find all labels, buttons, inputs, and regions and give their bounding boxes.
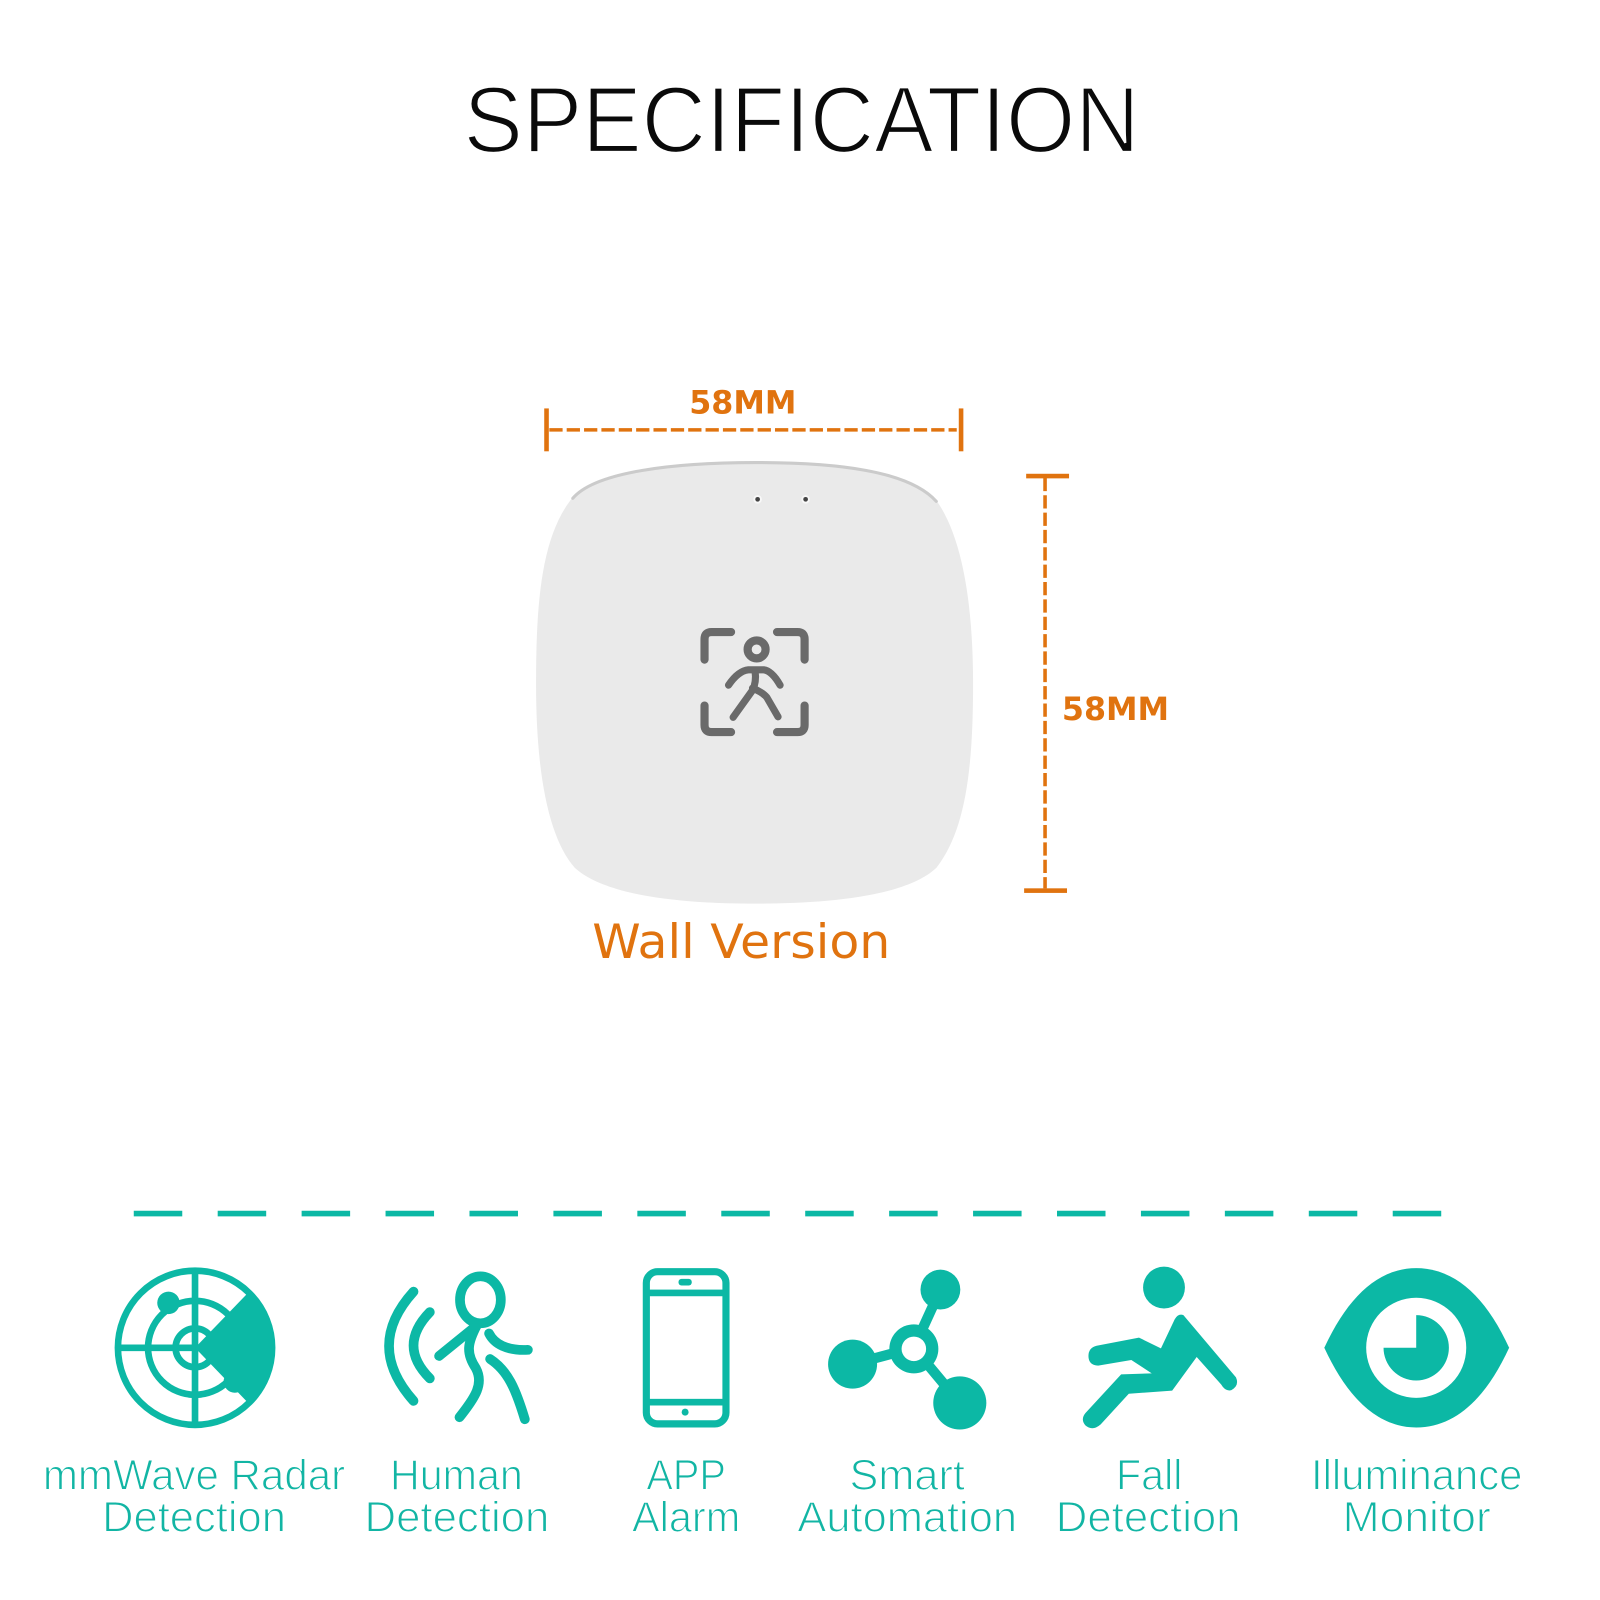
label: Illuminance Monitor xyxy=(1311,1452,1522,1541)
icon: radar xyxy=(116,1269,275,1426)
width dimension: 58MM xyxy=(544,386,963,451)
label: Human Detection: Detection xyxy=(365,1494,549,1541)
caption: wall version: Wall Version xyxy=(592,915,890,970)
height dimension: 58MM: 58MM xyxy=(1062,692,1169,728)
label: APP Alarm: Alarm xyxy=(632,1494,740,1541)
label: mmWave Radar Detection: mmWave Radar xyxy=(43,1452,345,1499)
label: Smart Automation: Smart xyxy=(850,1452,965,1499)
label: APP Alarm: APP xyxy=(646,1452,726,1499)
label: Fall Detection: Fall xyxy=(1116,1452,1182,1499)
device: wall sensor xyxy=(536,462,973,904)
title: SPECIFICATION xyxy=(464,67,1140,172)
icon: smart automation network xyxy=(828,1270,986,1429)
label: APP Alarm xyxy=(632,1452,740,1541)
icon: person in scan frame xyxy=(705,632,805,732)
width dimension: 58MM: 58MM xyxy=(689,386,796,422)
label: mmWave Radar Detection: Detection xyxy=(102,1494,286,1541)
label: Human Detection: Human xyxy=(390,1452,523,1499)
indicator dots xyxy=(753,495,810,504)
icon: human detection xyxy=(389,1276,528,1419)
label: Fall Detection xyxy=(1056,1452,1241,1541)
label: mmWave Radar Detection xyxy=(43,1452,345,1541)
label: Fall Detection: Detection xyxy=(1056,1494,1241,1541)
divider xyxy=(134,1211,1443,1216)
icon: illuminance eye xyxy=(1324,1268,1509,1427)
label: Human Detection xyxy=(365,1452,549,1541)
label: Smart Automation: Automation xyxy=(797,1494,1017,1541)
label: Illuminance Monitor: Monitor xyxy=(1343,1494,1491,1541)
height dimension: 58MM xyxy=(1024,474,1169,893)
icon: phone xyxy=(645,1272,727,1424)
label: Smart Automation xyxy=(797,1452,1017,1541)
icon: fall detection xyxy=(1083,1267,1237,1428)
label: Illuminance Monitor: Illuminance xyxy=(1311,1452,1522,1499)
